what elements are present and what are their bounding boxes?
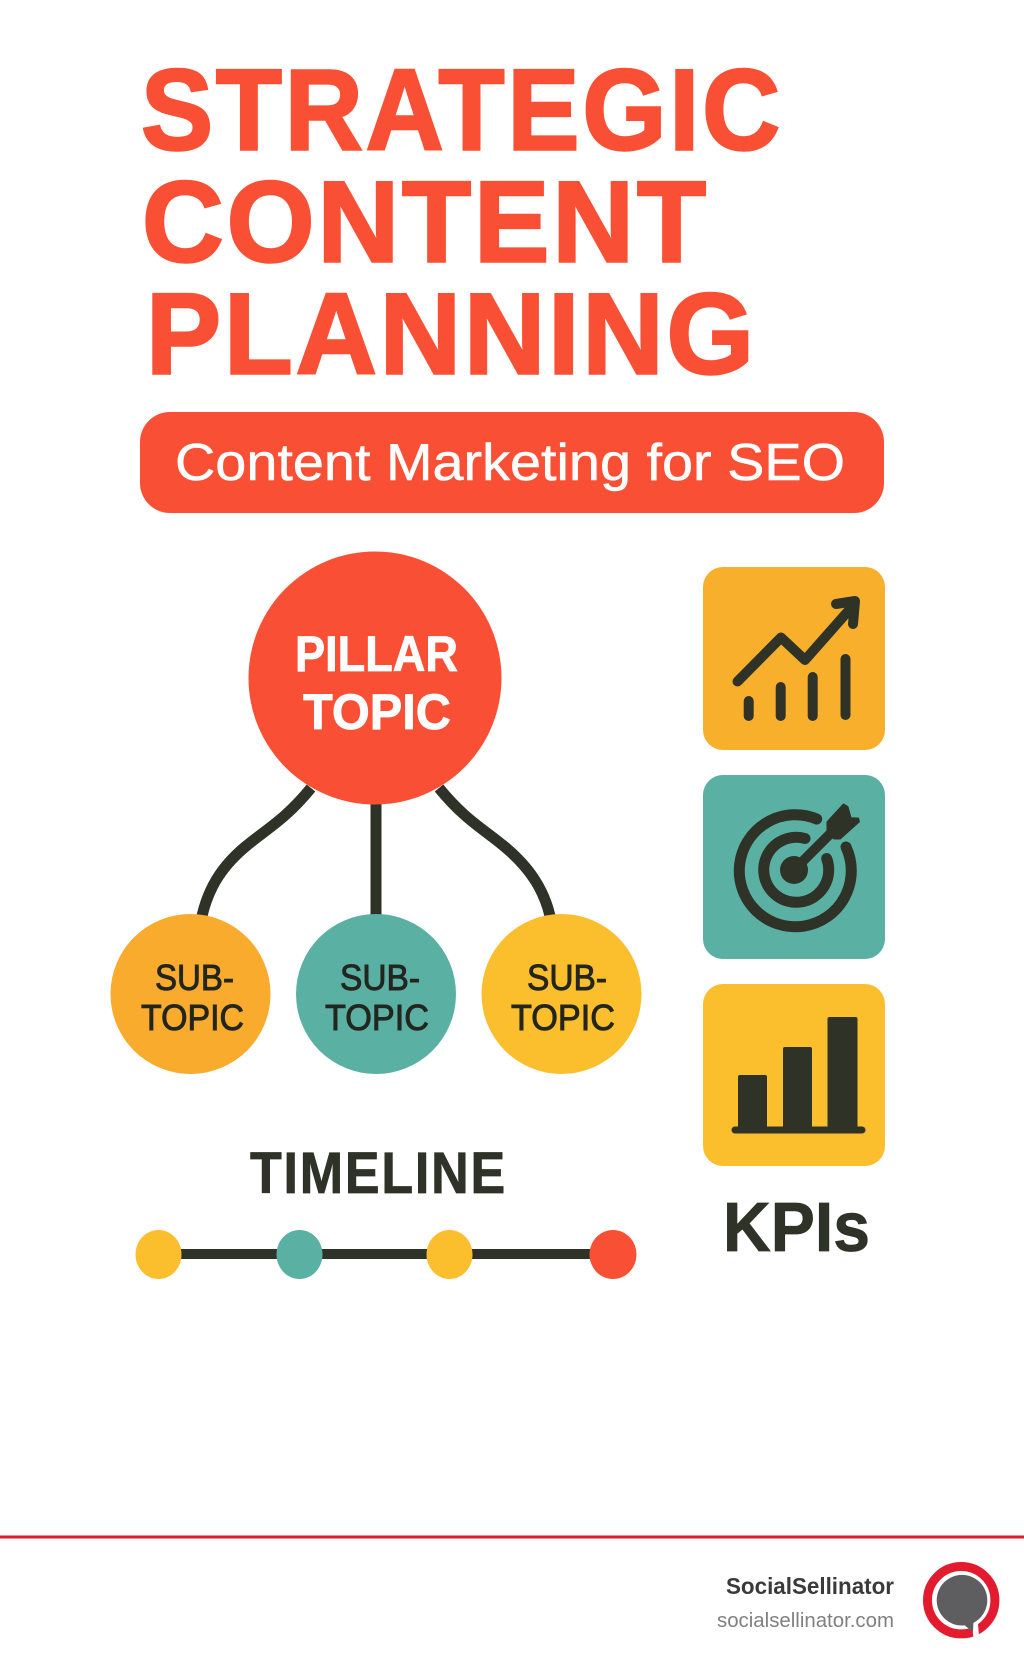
timeline heading: TIMELINE — [250, 1141, 507, 1206]
icon: bar chart — [703, 984, 885, 1166]
sub-topic node 2: TOPIC — [325, 997, 429, 1038]
pillar topic node: PILLAR — [295, 626, 458, 682]
footer rule — [0, 1536, 1024, 1538]
footer url: socialsellinator.com — [717, 1610, 894, 1632]
footer brand name: SocialSellinator — [726, 1573, 894, 1599]
sub-topic node 2 — [296, 914, 456, 1074]
subtitle pill: Content Marketing for SEO — [175, 434, 845, 492]
KPIs label: KPIs — [723, 1188, 870, 1266]
sub-topic node 1 — [110, 914, 270, 1074]
sub-topic node 1: TOPIC — [141, 997, 244, 1038]
subtitle pill — [140, 412, 884, 513]
title: STRATEGIC — [141, 46, 783, 174]
footer logo — [928, 1566, 995, 1638]
sub-topic node 3: SUB- — [527, 957, 607, 998]
pillar topic node — [248, 552, 502, 804]
icon: target — [703, 775, 885, 959]
pillar topic node: TOPIC — [303, 684, 451, 740]
title — [141, 46, 783, 398]
sub-topic node 3: TOPIC — [511, 997, 615, 1038]
title: PLANNING — [146, 270, 757, 398]
timeline — [136, 1230, 636, 1279]
sub-topic node 2: SUB- — [340, 957, 420, 998]
connector lines — [202, 788, 550, 916]
icon: growth chart — [703, 567, 885, 750]
title: CONTENT — [142, 158, 709, 286]
sub-topic node 3 — [482, 914, 642, 1074]
sub-topic node 1: SUB- — [155, 957, 234, 998]
